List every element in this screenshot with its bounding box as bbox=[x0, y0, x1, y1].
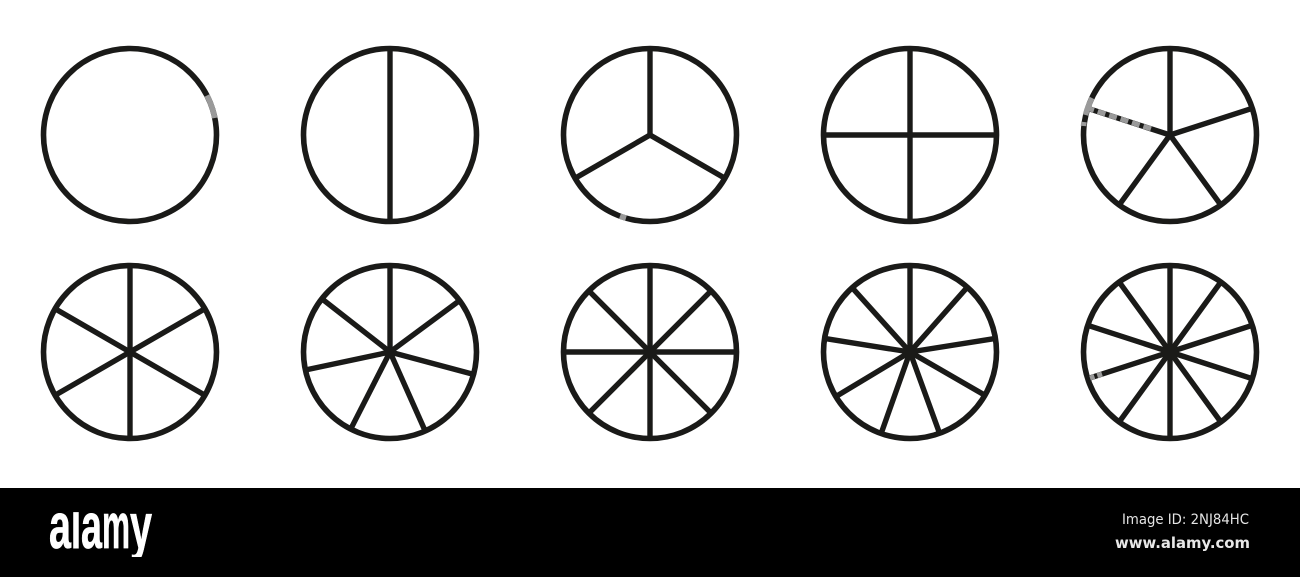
circle: three equal parts bbox=[564, 48, 736, 222]
circle: nine equal parts bbox=[824, 266, 996, 438]
image id: Image ID: 2NJ84HC bbox=[1122, 512, 1249, 528]
circle: whole, no divisions bbox=[44, 48, 216, 222]
circle: six equal parts bbox=[44, 266, 216, 438]
website: www.alamy.com bbox=[1115, 534, 1250, 552]
circle: five equal parts bbox=[1084, 48, 1256, 222]
logo: alamy: l bbox=[71, 505, 81, 559]
circle: ten equal parts bbox=[1084, 266, 1256, 438]
logo: alamy: a bbox=[81, 490, 102, 562]
circle: eight equal parts bbox=[564, 266, 736, 438]
footer band bbox=[0, 488, 1300, 577]
circle: four equal parts bbox=[824, 48, 996, 222]
logo: alamy: a bbox=[49, 490, 71, 562]
circle: seven equal parts bbox=[304, 266, 476, 438]
logo: alamy: m bbox=[102, 490, 130, 562]
logo: alamy bbox=[50, 512, 152, 557]
circle: two equal parts bbox=[304, 48, 476, 222]
logo: alamy: y bbox=[130, 490, 152, 562]
